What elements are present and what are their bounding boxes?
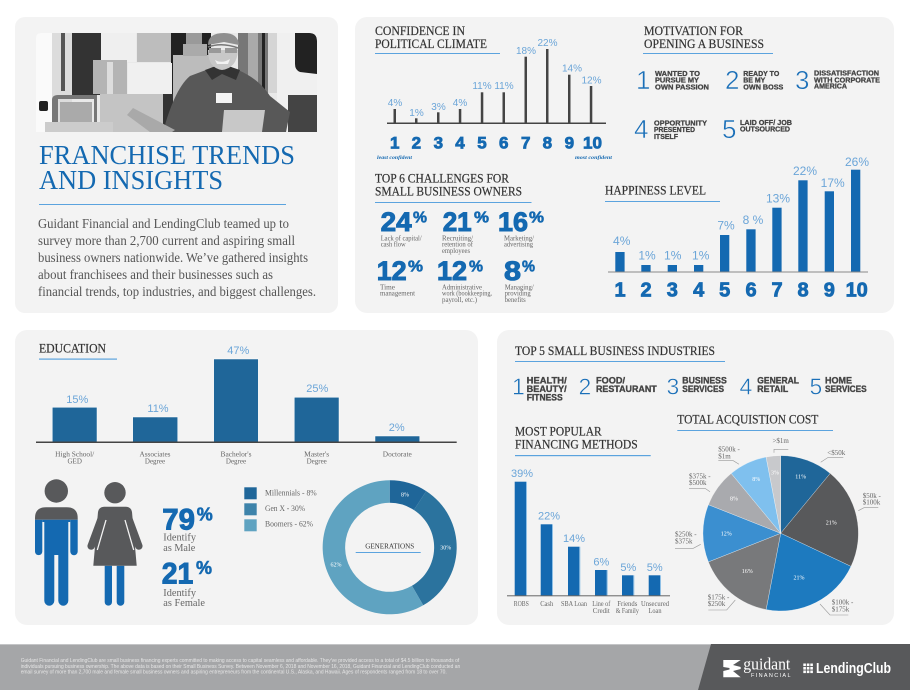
- chart: total acquisition cost pie: >$1m: [772, 437, 789, 445]
- stat: capital: Lack of capital/: [381, 234, 422, 242]
- footer disclaimer: individuals pursuing business ownership. The above data is based on their Small Business Survey. Between November 6, 2018 and November 16, 2018, Guidant Financial and LendingClub conducted an: [21, 664, 460, 670]
- list: top 5 small business industries: 5: [810, 373, 822, 399]
- stat: time: Time: [380, 283, 395, 291]
- stat: managing: %: [522, 258, 535, 276]
- chart: total acquisition cost pie: $50k -: [863, 492, 881, 500]
- list: top 5 small business industries: SERVICES: [825, 384, 867, 394]
- list: top 5 small business industries: HEALTH/: [527, 376, 567, 386]
- stat: recruiting: employees: [442, 247, 470, 255]
- stat: marketing: 16: [498, 207, 528, 237]
- list: top 5 small business industries: 1: [512, 373, 525, 399]
- stat: managing: providing: [505, 290, 531, 298]
- chart: total acquisition cost pie: 8%: [752, 477, 760, 483]
- chart: confidence in political climate: 12%: [581, 76, 602, 86]
- stat: identify as female: Identify: [163, 587, 196, 599]
- stat: identify as male: as Male: [163, 542, 195, 554]
- chart: happiness level: 26%: [845, 155, 869, 169]
- chart: confidence in political climate: 18%: [516, 46, 536, 57]
- chart: education: High School/: [55, 450, 94, 458]
- footer band: [0, 644, 910, 690]
- list: motivation for opening a business: WITH CORPORATE: [814, 75, 880, 84]
- chart: most popular financing methods: Unsecured: [641, 600, 669, 608]
- list: motivation for opening a business: READY TO: [743, 69, 779, 78]
- chart: confidence in political climate: 1%: [409, 108, 424, 119]
- title: [39, 140, 295, 195]
- chart: happiness level: 2: [640, 280, 652, 302]
- legend: generations: Millennials - 8%: [265, 487, 317, 497]
- chart: confidence in political climate: 3%: [431, 102, 446, 113]
- panel: introduction: [15, 17, 338, 313]
- intro paragraph: Guidant Financial and LendingClub teamed up to: [38, 216, 289, 231]
- heading: financing: MOST POPULAR: [515, 423, 602, 438]
- chart: total acquisition cost pie: <$50k: [827, 449, 846, 457]
- stat: administrative: [437, 256, 492, 304]
- list: top 5 small business industries: RETAIL: [757, 384, 789, 394]
- chart: total acquisition cost pie: 11%: [795, 475, 806, 481]
- chart: total acquisition cost pie: $250k -: [675, 530, 697, 538]
- chart: confidence in political climate: 5: [477, 133, 487, 152]
- chart: confidence in political climate: 4%: [453, 98, 467, 109]
- chart: happiness level: 4%: [613, 234, 631, 248]
- chart: happiness level: [605, 155, 869, 302]
- chart: most popular financing methods: 5%: [647, 562, 663, 574]
- chart: total acquisition cost pie: $500k -: [718, 446, 741, 454]
- stat: marketing: %: [529, 210, 544, 226]
- chart: happiness level: 8: [797, 280, 809, 302]
- chart: confidence in political climate: 4: [455, 133, 465, 152]
- legend: generations: [244, 487, 317, 531]
- chart: happiness level: 4: [693, 280, 705, 302]
- stat: identify as male: Identify: [163, 531, 196, 543]
- stat: recruiting: %: [474, 210, 489, 226]
- list: motivation for opening a business: PRESENTED: [654, 125, 696, 134]
- stat: marketing: Marketing/: [504, 234, 534, 242]
- panel: industries and costs: [497, 330, 894, 625]
- chart: education: Master's: [304, 450, 329, 458]
- chart: happiness level: 1: [614, 280, 626, 302]
- list: top 5 small business industries: FOOD/: [596, 376, 626, 386]
- chart: education: 47%: [227, 345, 250, 357]
- chart: total acquisition cost pie: [675, 411, 881, 615]
- list: top 5 small business industries: [512, 343, 867, 403]
- list: motivation for opening a business: [634, 23, 880, 144]
- heading: education: EDUCATION: [39, 341, 107, 356]
- chart: total acquisition cost pie: $1m: [718, 452, 731, 460]
- chart: most popular financing methods: 6%: [593, 556, 609, 568]
- stats: top 6 challenges: [375, 170, 544, 304]
- chart: total acquisition cost pie: 8%: [730, 496, 738, 502]
- chart: education: 15%: [66, 394, 89, 406]
- logo: Guidant Financial: guidant: [743, 654, 791, 674]
- panel: survey results: [355, 17, 894, 313]
- chart: total acquisition cost pie: $100k: [863, 499, 881, 507]
- legend: generations: Boomers - 62%: [265, 519, 313, 529]
- heading: confidence: POLITICAL CLIMATE: [375, 36, 487, 51]
- heading: confidence: [375, 23, 500, 54]
- photo: delivery man with boxes: [36, 33, 317, 132]
- heading: acquisition: TOTAL ACQUISTION COST: [677, 411, 818, 426]
- chart: confidence in political climate: 14%: [562, 64, 582, 74]
- chart: confidence in political climate: 1: [390, 133, 399, 152]
- chart: confidence in political climate: 4%: [388, 98, 402, 109]
- stat: marketing: advertising: [504, 241, 533, 249]
- list: motivation for opening a business: BE MY: [743, 76, 765, 85]
- stat: recruiting: Recruiting/: [442, 234, 473, 242]
- list: motivation for opening a business: 4: [634, 114, 648, 144]
- chart: education: Doctorate: [383, 450, 412, 458]
- icon: female figure: [91, 482, 139, 606]
- stat: time: management: [380, 290, 415, 298]
- chart: happiness level: 8 %: [743, 213, 764, 227]
- list: motivation for opening a business: 1: [636, 65, 650, 95]
- list: motivation for opening a business: AMERICA: [814, 82, 848, 91]
- chart: total acquisition cost pie: $500k: [689, 479, 707, 487]
- stat: managing: Managing/: [505, 283, 534, 291]
- stat: identify as female: as Female: [163, 597, 205, 609]
- list: top 5 small business industries: GENERAL: [757, 376, 799, 386]
- title: FRANCHISE TRENDS: [39, 140, 295, 170]
- chart: education: 2%: [389, 422, 405, 434]
- stat: administrative: Administrative: [442, 283, 482, 291]
- stat: recruiting: retention of: [442, 241, 474, 249]
- chart: confidence in political climate: 7: [521, 133, 530, 152]
- list: motivation for opening a business: 2: [725, 65, 739, 95]
- list: motivation for opening a business: OWN PASSION: [655, 82, 709, 91]
- stat: identify as female: [162, 557, 212, 609]
- chart: generations donut: [323, 480, 457, 614]
- stat: time: 12: [377, 256, 407, 286]
- stat: capital: %: [413, 210, 427, 226]
- chart: happiness level: 13%: [766, 192, 790, 206]
- stat: identify as male: [162, 503, 213, 554]
- chart: education: Associates: [140, 450, 171, 458]
- chart: generations donut: 8%: [401, 492, 409, 498]
- heading: motivation: MOTIVATION FOR: [644, 23, 743, 38]
- chart: most popular financing methods: 39%: [511, 468, 533, 480]
- chart: total acquisition cost pie: $175k: [832, 606, 850, 614]
- heading: top 5: TOP 5 SMALL BUSINESS INDUSTRIES: [515, 343, 715, 358]
- chart: most popular financing methods: & Family: [616, 607, 639, 615]
- list: top 5 small business industries: RESTAURANT: [596, 384, 657, 394]
- chart: happiness level: 17%: [821, 176, 845, 190]
- chart: confidence in political climate: 9: [565, 133, 574, 152]
- chart: happiness level: 9: [824, 280, 835, 302]
- chart: total acquisition cost pie: $175k -: [708, 594, 730, 602]
- stat: administrative: %: [469, 258, 483, 276]
- chart: education: Degree: [226, 458, 246, 466]
- stat: administrative: payroll, etc.): [442, 296, 478, 304]
- chart: education: Degree: [145, 458, 165, 466]
- list: top 5 small business industries: BUSINESS: [682, 376, 727, 386]
- footer disclaimer: [21, 658, 460, 676]
- intro paragraph: financial trends, top industries, and biggest challenges.: [38, 284, 316, 299]
- chart: confidence in political climate: 3: [434, 133, 443, 152]
- list: top 5 small business industries: HOME: [825, 376, 852, 386]
- chart: most popular financing methods: [507, 423, 670, 615]
- chart: most popular financing methods: Friends: [617, 600, 638, 608]
- stat: administrative: 12: [437, 256, 467, 286]
- list: motivation for opening a business: DISSATISFACTION: [814, 69, 879, 78]
- logo: Guidant Financial: [723, 654, 791, 679]
- title: AND INSIGHTS: [39, 165, 223, 195]
- stat: managing: [504, 256, 535, 304]
- chart: confidence in political climate: 8: [543, 133, 552, 152]
- intro paragraph: survey more than 2,700 current and aspiring small: [38, 233, 295, 248]
- list: top 5 small business industries: 4: [740, 373, 752, 399]
- list: motivation for opening a business: 3: [795, 65, 809, 95]
- stat: marketing: [498, 207, 544, 249]
- chart: total acquisition cost pie: $100k -: [832, 598, 854, 606]
- stat: managing: benefits: [505, 296, 526, 304]
- list: motivation for opening a business: LAID OFF/ JOB: [740, 118, 793, 127]
- logo: LendingClub: LendingClub: [816, 661, 891, 677]
- chart: happiness level: 1%: [664, 248, 682, 262]
- chart: most popular financing methods: SBA Loan: [561, 600, 587, 608]
- stat: recruiting: 21: [443, 207, 472, 237]
- footer disclaimer: email survey of more than 2,700 male and female small business owners and aspiring entrepreneurs from the continental U.S., Alaska, and Hawaii. Ages of respondents ranged from 18 to over 70.: [21, 670, 447, 676]
- chart: education: GED: [68, 458, 82, 466]
- chart: total acquisition cost pie: 3%: [771, 470, 779, 476]
- chart: confidence in political climate: 6: [499, 133, 508, 152]
- chart: confidence in political climate: 10: [583, 133, 602, 152]
- chart: total acquisition cost pie: 16%: [742, 569, 753, 575]
- stat: recruiting: [442, 207, 489, 255]
- chart: generations donut: GENERATIONS: [365, 541, 414, 550]
- list: motivation for opening a business: WANTED TO: [655, 69, 700, 78]
- heading: motivation: [643, 23, 773, 54]
- chart: generations donut: 30%: [440, 545, 451, 551]
- legend: generations: Gen X - 30%: [265, 503, 305, 513]
- chart: happiness level: 1%: [692, 248, 710, 262]
- chart: most popular financing methods: Loan: [648, 607, 662, 615]
- list: top 5 small business industries: BEAUTY/: [527, 384, 567, 394]
- stat: capital: 24: [381, 207, 412, 237]
- chart: education: 11%: [147, 403, 169, 415]
- chart: most popular financing methods: ROBS: [514, 600, 529, 608]
- chart: happiness level: 22%: [793, 164, 817, 178]
- list: top 5 small business industries: SERVICES: [682, 384, 724, 394]
- stat: time: [377, 256, 423, 298]
- chart: happiness level: 3: [667, 280, 678, 302]
- chart: total acquisition cost pie: $250k: [708, 600, 726, 608]
- panel: demographics: [15, 330, 478, 625]
- heading: challenges: SMALL BUSINESS OWNERS: [375, 184, 522, 199]
- chart: education: Degree: [307, 458, 327, 466]
- stat: administrative: work (bookkeeping,: [442, 290, 492, 298]
- list: motivation for opening a business: OUTSOURCED: [740, 125, 791, 134]
- chart: most popular financing methods: 5%: [620, 562, 636, 574]
- chart: most popular financing methods: 22%: [538, 511, 560, 523]
- stat: capital: cash flow: [381, 241, 407, 249]
- chart: most popular financing methods: Credit: [593, 607, 610, 615]
- chart: confidence in political climate: [375, 23, 613, 161]
- chart: happiness level: 1%: [638, 248, 656, 262]
- chart: happiness level: 10: [846, 280, 868, 302]
- chart: total acquisition cost pie: $375k -: [689, 472, 711, 480]
- stat: managing: 8: [504, 256, 521, 286]
- chart: most popular financing methods: 14%: [563, 533, 585, 545]
- chart: total acquisition cost pie: 12%: [721, 532, 732, 538]
- list: top 5 small business industries: 3: [666, 373, 679, 399]
- list: motivation for opening a business: PURSUE MY: [655, 76, 699, 85]
- heading: confidence: CONFIDENCE IN: [375, 23, 466, 38]
- chart: generations donut: 62%: [330, 563, 342, 569]
- chart: education: Bachelor's: [220, 450, 252, 458]
- intro paragraph: about franchisees and their businesses such as: [38, 267, 273, 282]
- chart: most popular financing methods: Cash: [540, 600, 554, 608]
- list: motivation for opening a business: OWN BOSS: [743, 82, 783, 91]
- stat: identify as male: %: [197, 504, 213, 524]
- chart: happiness level: 5: [719, 280, 730, 302]
- chart: most popular financing methods: Line of: [592, 600, 611, 608]
- list: top 5 small business industries: 2: [578, 373, 591, 399]
- heading: financing: FINANCING METHODS: [515, 436, 638, 451]
- heading: challenges: [375, 170, 532, 203]
- heading: happiness: HAPPINESS LEVEL: [605, 182, 706, 197]
- chart: confidence in political climate: least confident: [377, 155, 412, 161]
- chart: confidence in political climate: 22%: [537, 38, 558, 49]
- list: motivation for opening a business: OPPORTUNITY: [654, 118, 707, 127]
- list: top 5 small business industries: FITNESS: [527, 393, 563, 403]
- intro paragraph: business owners nationwide. We’ve gathered insights: [38, 250, 308, 265]
- chart: total acquisition cost pie: $375k: [675, 538, 693, 546]
- list: motivation for opening a business: ITSELF: [654, 132, 678, 141]
- chart: confidence in political climate: 11%: [494, 81, 514, 92]
- chart: confidence in political climate: most confident: [575, 155, 613, 161]
- chart: education: 25%: [306, 383, 329, 395]
- intro paragraph: [38, 216, 316, 299]
- stat: identify as male: 79: [162, 503, 195, 536]
- chart: education: [36, 341, 457, 466]
- chart: total acquisition cost pie: 21%: [794, 575, 804, 581]
- chart: confidence in political climate: 2: [412, 133, 421, 152]
- stat: capital: [381, 207, 427, 249]
- heading: motivation: OPENING A BUSINESS: [644, 36, 764, 51]
- heading: financing: [515, 423, 651, 456]
- icon: male figure: [35, 479, 78, 606]
- chart: confidence in political climate: 11%: [472, 81, 492, 92]
- stat: identify as female: %: [196, 558, 212, 578]
- stat: time: %: [408, 258, 423, 276]
- chart: happiness level: 6: [745, 280, 757, 302]
- heading: challenges: TOP 6 CHALLENGES FOR: [375, 170, 509, 185]
- footer disclaimer: Guidant Financial and LendingClub are small business financing experts committed to making access to capital seamless and affordable. They've provided access to a total of $4.5 billion to thousands of: [21, 658, 460, 664]
- chart: happiness level: 7%: [717, 218, 735, 232]
- list: motivation for opening a business: 5: [722, 114, 736, 144]
- chart: total acquisition cost pie: 21%: [826, 520, 837, 526]
- logo: Guidant Financial: FINANCIAL: [751, 673, 790, 679]
- chart: happiness level: 7: [771, 280, 783, 302]
- stat: identify as female: 21: [162, 557, 193, 590]
